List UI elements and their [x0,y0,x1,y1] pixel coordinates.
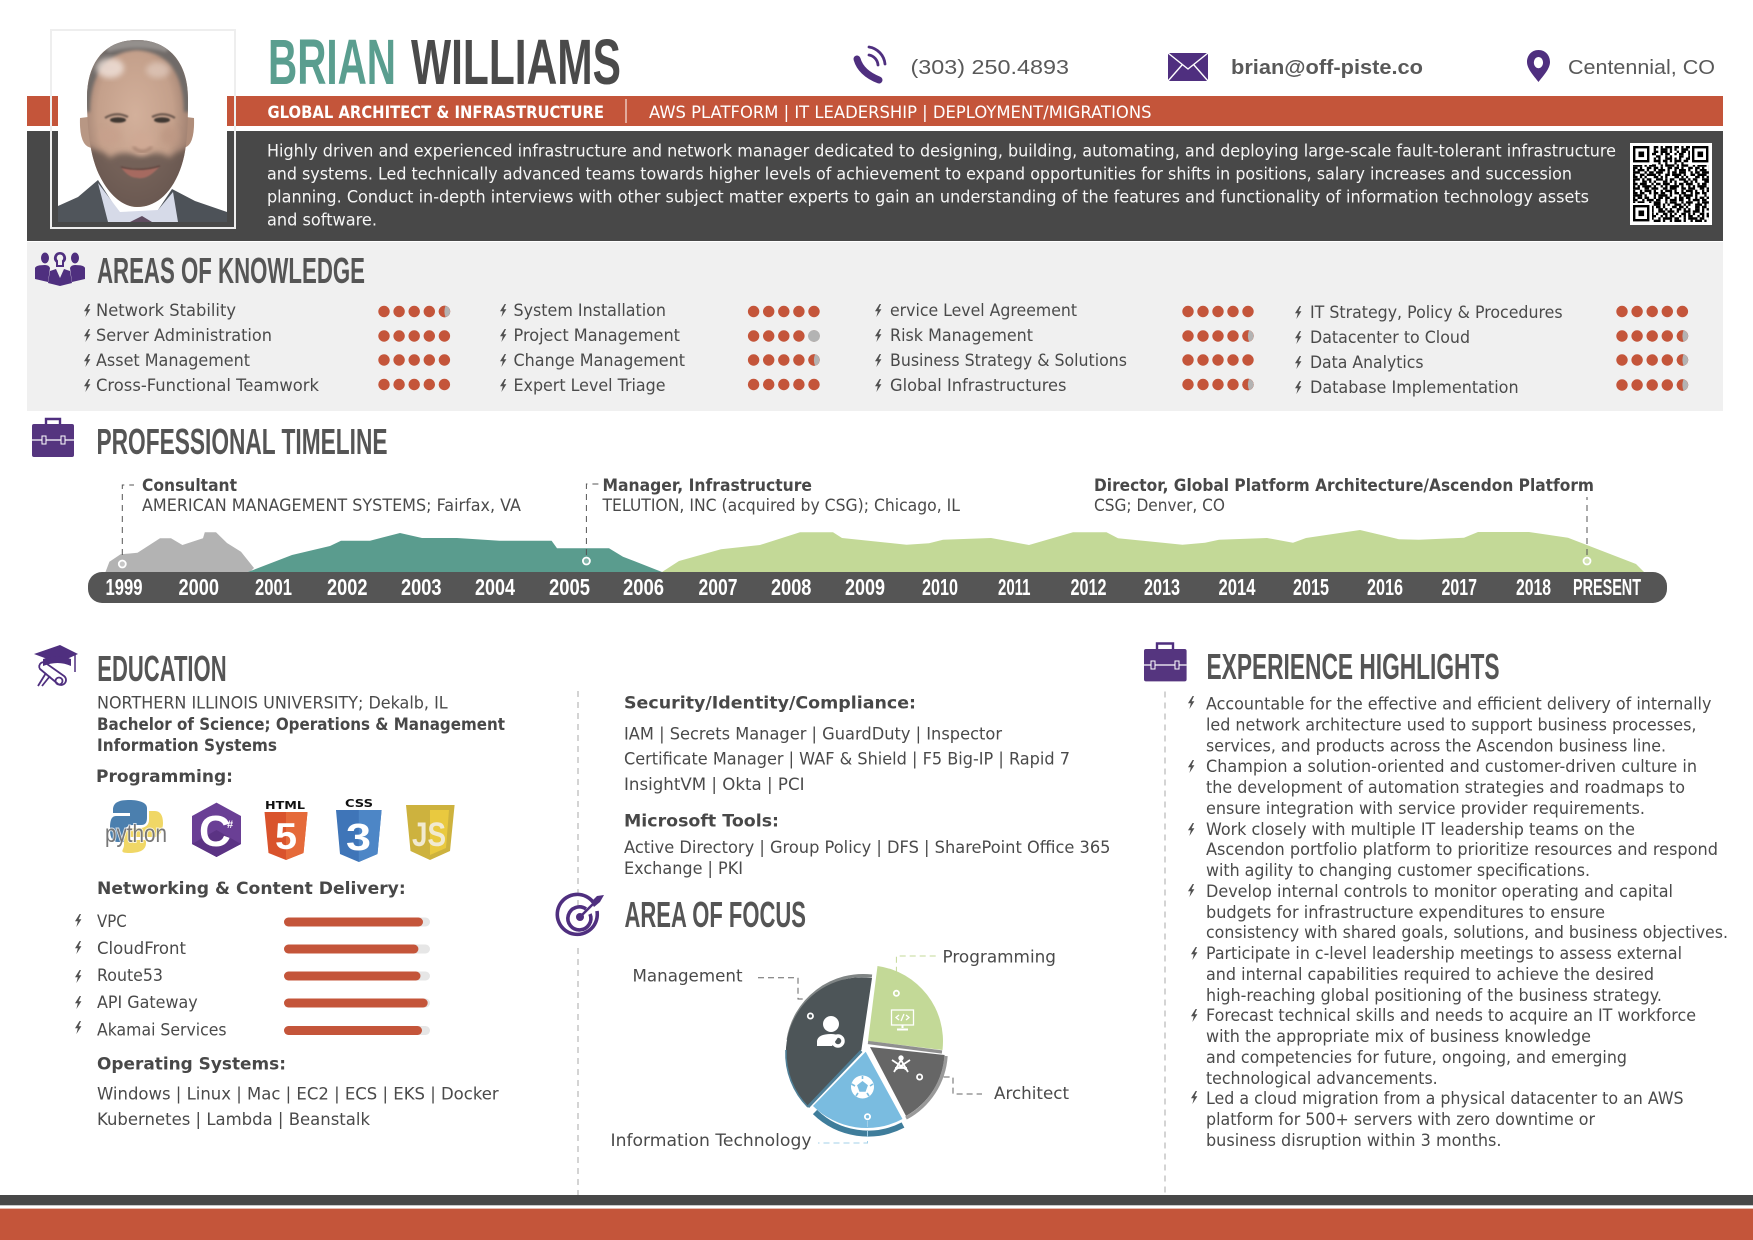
networking skills bars [75,912,430,1040]
experience bullets: platform for 500+ servers with zero downtime or [1206,1110,1595,1129]
knowledge column 2 [500,301,820,395]
networking skills bars: CloudFront [97,939,187,958]
icon: briefcase experience [1144,644,1187,681]
pie labels [610,948,1070,1150]
experience bullets: Accountable for the effective and efficient delivery of internally [1206,694,1712,714]
networking heading: Networking & Content Delivery: [97,879,406,898]
experience bullets: technological advancements. [1206,1069,1438,1088]
summary text [267,142,1616,230]
name title: BRIAN [268,26,396,98]
heading: professional timeline: PROFESSIONAL TIMELINE [96,421,388,462]
orange title bar [27,96,1723,126]
icon: C sharp: # [227,819,233,831]
icon: CSS3: 3 [346,817,371,859]
icon: phone [857,47,885,80]
knowledge column 3 [875,301,1254,395]
timeline year bar: 2016 [1367,574,1403,600]
timeline year bar: 2009 [845,574,885,600]
portrait photo [51,30,235,228]
icon: team [35,252,85,286]
networking skills bars: VPC [97,912,127,931]
experience bullets: led network architecture used to support business processes, [1206,716,1696,734]
timeline year bar: 2005 [549,574,590,600]
timeline year bar: 2002 [327,574,368,600]
role text [268,99,1152,123]
experience bullets: with the appropriate mix of business knowledge [1206,1027,1591,1046]
experience bullets: Work closely with multiple IT leadership teams on the [1206,820,1635,839]
pie labels: Architect [994,1084,1070,1103]
location: Centennial, CO [1568,56,1715,79]
programming heading: Programming: [96,767,233,786]
experience bullets: high-reaching global positioning of the business strategy. [1206,986,1662,1005]
knowledge column 3: Risk Management [890,326,1034,345]
timeline year bar: 2006 [623,574,664,600]
icon: envelope [1168,53,1208,81]
experience bullets: services, and products across the Ascendon business line. [1206,736,1666,756]
knowledge column 3: Business Strategy & Solutions [890,351,1127,370]
knowledge column 1: Cross-Functional Teamwork [96,376,319,395]
timeline year bar: 2000 [178,574,219,600]
icon: target [557,894,604,934]
experience bullets: Champion a solution-oriented and customer-driven culture in [1206,757,1697,776]
icon: graduation cap [34,645,78,686]
dark summary panel [27,131,1723,241]
icon: CSS3 [336,797,382,862]
pie labels: Management [632,967,743,986]
pie chart [786,966,946,1134]
security and compliance [624,693,1070,794]
pie icon: manager [817,1016,843,1046]
timeline year bar: 2001 [255,574,292,600]
name title [268,26,621,98]
timeline job labels: TELUTION, INC (acquired by CSG); Chicago, IL [602,496,961,515]
networking skills bars: Akamai Services [97,1020,227,1040]
education details: NORTHERN ILLINOIS UNIVERSITY; Dekalb, IL [97,694,448,712]
microsoft tools: Microsoft Tools: [624,812,779,831]
security and compliance: IAM | Secrets Manager | GuardDuty | Inspector [624,724,1002,744]
icon: HTML5: HTML [265,799,305,812]
timeline year bar: 2015 [1293,574,1329,600]
icon: C sharp [192,803,241,857]
knowledge column 2: System Installation [514,301,666,320]
icon: location pin [1527,50,1550,82]
heading: experience highlights: EXPERIENCE HIGHLIGHTS [1206,646,1500,687]
QR code [1630,143,1712,225]
knowledge column 2: Expert Level Triage [514,376,666,395]
summary text: Highly driven and experienced infrastructure and network manager dedicated to designing, building, automating, and deploying large-scale fault-tolerant infrastructure [267,142,1616,160]
security and compliance: InsightVM | Okta | PCI [624,775,804,794]
experience bullets: ensure integration with service provider requirements. [1206,799,1645,818]
knowledge column 1: Network Stability [96,301,236,320]
knowledge column 3: Global Infrastructures [890,376,1066,395]
microsoft tools: Active Directory | Group Policy | DFS | SharePoint Office 365 [624,838,1110,857]
knowledge column 3: ervice Level Agreement [890,301,1078,320]
icon: HTML5 [264,799,308,860]
timeline year bar: 1999 [106,574,142,600]
timeline year bar: 2013 [1144,574,1180,600]
footer bands [0,1195,1753,1240]
education details [97,694,505,755]
networking skills bars: Route53 [97,966,163,985]
experience bullets: Develop internal controls to monitor operating and capital [1206,882,1673,901]
icon: HTML5: 5 [275,816,297,857]
pie icon: network ball [851,1076,874,1098]
summary text: planning. Conduct in-depth interviews with other subject matter experts to gain an understanding of the features and functionality of information technology assets [267,188,1589,206]
microsoft tools [624,812,1110,878]
icon: python [105,800,167,853]
timeline year bar [88,572,1667,603]
experience bullets: Ascendon portfolio platform to prioritize resources and respond [1206,840,1718,859]
timeline job labels: CSG; Denver, CO [1094,496,1225,515]
education details: Information Systems [97,736,277,755]
timeline job labels [142,476,1594,515]
experience bullets: budgets for infrastructure expenditures to ensure [1206,903,1605,922]
experience bullets: and internal capabilities required to achieve the desired [1206,965,1654,984]
experience bullets: the development of automation strategies and roadmaps to [1206,778,1685,797]
heading: education: EDUCATION [97,648,227,689]
operating systems: Windows | Linux | Mac | EC2 | ECS | EKS | Docker [97,1084,499,1104]
summary text: and systems. Led technically advanced teams towards higher levels of achievement to expand opportunities for shifts in positions, salary increases and succession [267,164,1572,184]
experience bullets [1188,694,1728,1150]
timeline year bar: 2018 [1516,574,1551,600]
timeline year bar: 2014 [1218,574,1256,600]
knowledge column 1: Server Administration [96,326,272,345]
email address: brian@off-piste.co [1231,56,1423,79]
name title: WILLIAMS [411,26,621,98]
summary text: and software. [267,210,377,230]
heading: areas of knowledge: AREAS OF KNOWLEDGE [97,250,365,291]
icon: C sharp: C [199,807,231,856]
knowledge column 1: Asset Management [96,351,251,370]
timeline area chart [106,484,1644,572]
icon: JavaScript [406,805,455,860]
icon: briefcase timeline [32,419,74,457]
heading: area of focus: AREA OF FOCUS [624,894,806,935]
pie leaders [758,956,982,1143]
timeline job labels: AMERICAN MANAGEMENT SYSTEMS; Fairfax, VA [142,496,522,515]
timeline year bar: 2004 [475,574,515,600]
pie icon: code monitor [892,1010,914,1030]
icon: python: python [105,820,167,848]
networking skills bars: API Gateway [97,993,198,1012]
security and compliance: Certificate Manager | WAF & Shield | F5 Big-IP | Rapid 7 [624,750,1070,768]
knowledge column 2: Project Management [514,326,681,345]
experience bullets: consistency with shared goals, solutions, and business objectives. [1206,923,1728,942]
phone number: (303) 250.4893 [910,56,1069,79]
grey knowledge panel [27,242,1723,411]
operating systems: Kubernetes | Lambda | Beanstalk [97,1110,370,1129]
experience bullets: business disruption within 3 months. [1206,1131,1502,1150]
knowledge column 4 [1295,303,1688,397]
operating systems [97,1054,499,1129]
role text: GLOBAL ARCHITECT & INFRASTRUCTURE [268,103,604,122]
experience bullets: Forecast technical skills and needs to acquire an IT workforce [1206,1006,1696,1025]
security and compliance: Security/Identity/Compliance: [624,693,916,712]
timeline year bar: 2011 [998,574,1031,600]
timeline year bar: 2008 [771,574,812,600]
timeline year bar: PRESENT [1573,574,1641,600]
education details: Bachelor of Science; Operations & Management [97,715,505,734]
knowledge column 2: Change Management [514,351,686,370]
timeline year bar: 2007 [698,574,738,600]
pie labels: Information Technology [610,1131,812,1150]
knowledge column 4: Datacenter to Cloud [1310,328,1470,347]
role text: AWS PLATFORM | IT LEADERSHIP | DEPLOYMENT/MIGRATIONS [649,103,1152,122]
timeline year bar: 2017 [1442,574,1477,600]
experience bullets: with agility to changing customer specifications. [1206,861,1590,880]
microsoft tools: Exchange | PKI [624,859,743,878]
timeline year bar: 2012 [1070,574,1106,600]
pie icon: compass [892,1056,910,1072]
timeline year bar: 2003 [401,574,442,600]
experience bullets: Led a cloud migration from a physical datacenter to an AWS [1206,1089,1684,1108]
timeline year bar: 2010 [922,574,958,600]
timeline job labels: Manager, Infrastructure [602,476,812,495]
knowledge column 1 [84,301,450,395]
icon: JavaScript: JS [412,816,446,854]
pie labels: Programming [942,948,1056,967]
knowledge column 4: IT Strategy, Policy & Procedures [1310,303,1563,322]
experience bullets: and competencies for future, ongoing, and emerging [1206,1048,1627,1067]
timeline job labels: Director, Global Platform Architecture/Ascendon Platform [1094,476,1594,495]
timeline job labels: Consultant [142,476,237,495]
knowledge column 4: Data Analytics [1310,353,1424,372]
experience bullets: Participate in c-level leadership meetings to assess external [1206,944,1682,963]
operating systems: Operating Systems: [97,1054,286,1074]
icon: CSS3: CSS [345,797,373,810]
knowledge column 4: Database Implementation [1310,378,1519,397]
